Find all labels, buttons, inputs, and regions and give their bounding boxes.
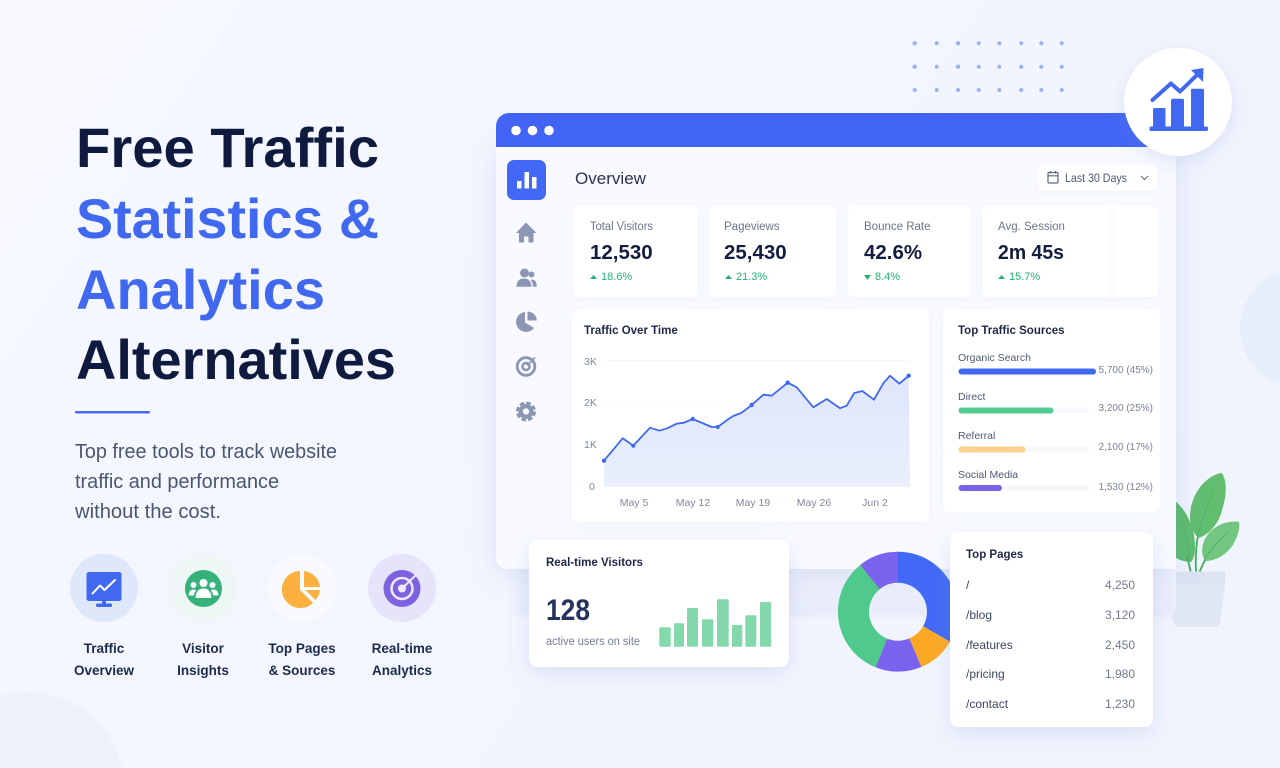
pot — [1172, 572, 1225, 627]
sidebar — [507, 160, 546, 420]
source row: direct: 3,200 (25%) — [1099, 403, 1153, 414]
stat card: bounce rate: Bounce Rate — [864, 221, 930, 233]
panel: top traffic sources — [943, 310, 1160, 512]
stat card: avg session: Avg. Session — [998, 221, 1065, 233]
label — [372, 641, 433, 678]
panel: traffic over time — [572, 310, 929, 522]
card: top pages: /pricing — [966, 667, 1005, 681]
stat card: bounce rate: 8.4% — [875, 271, 900, 283]
feature: traffic overview — [70, 554, 138, 678]
label: Traffic — [84, 641, 125, 656]
chart: area line: May 5 — [620, 497, 648, 509]
icon: target — [517, 358, 535, 375]
card: top pages: /contact — [966, 697, 1009, 711]
card: top pages: 4,250 — [1105, 578, 1135, 592]
chart: area line: 2K — [584, 397, 597, 409]
subtitle — [74, 441, 337, 523]
bar chart: live visitors — [659, 599, 771, 647]
icon: pie chart — [282, 571, 320, 608]
chart: area line: Jun 2 — [862, 497, 888, 509]
label: & Sources — [269, 663, 335, 678]
label — [74, 641, 135, 678]
subtitle: without the cost. — [74, 501, 221, 523]
panel: traffic over time: Traffic Over Time — [584, 325, 678, 337]
source row: social media — [958, 469, 1153, 493]
stat card: total visitors — [574, 206, 698, 297]
title: Analytics — [76, 258, 325, 321]
source row: organic search — [958, 352, 1153, 376]
dashboard window — [496, 113, 1176, 569]
icon: bars with rising arrow — [1150, 68, 1208, 131]
date range selector: Last 30 Days — [1065, 173, 1127, 185]
subtitle: traffic and performance — [75, 471, 279, 493]
stat card: avg session: 2m 45s — [998, 241, 1064, 264]
icon: monitor with trend line — [86, 572, 122, 607]
card: real-time visitors — [529, 540, 789, 667]
chart: area line: 3K — [584, 356, 597, 368]
icon: home — [516, 222, 536, 242]
stat card: avg session: 15.7% — [1009, 271, 1040, 283]
stat card: pageviews: Pageviews — [724, 221, 780, 233]
logo icon — [507, 160, 546, 200]
card: top pages: Top Pages — [966, 549, 1023, 561]
card: top pages: / — [966, 578, 970, 592]
source row: direct — [958, 391, 1153, 414]
card: top pages: /blog — [966, 608, 992, 622]
middle leaf — [1190, 473, 1226, 538]
card: top pages: 1,230 — [1105, 697, 1135, 711]
card: top pages: 3,120 — [1105, 608, 1135, 622]
title: Statistics & — [76, 187, 379, 250]
card: real-time visitors: active users on site — [546, 636, 640, 648]
feature: visitor insights — [169, 554, 237, 678]
subtitle: Top free tools to track website — [75, 441, 337, 463]
icon: group of people — [185, 570, 222, 607]
source row: referral — [958, 430, 1153, 453]
chart: area line: May 12 — [676, 497, 710, 509]
icon: target — [384, 570, 420, 607]
stat card: bounce rate: 42.6% — [864, 241, 922, 264]
label: Insights — [177, 663, 229, 678]
card: real-time visitors: Real-time Visitors — [546, 557, 643, 569]
label: Visitor — [182, 641, 225, 656]
dot grid decoration — [912, 41, 1064, 92]
badge: growth chart — [1124, 48, 1232, 156]
label — [177, 641, 229, 678]
icon: pie — [516, 312, 537, 332]
panel: top traffic sources: Top Traffic Sources — [958, 325, 1065, 337]
title: Alternatives — [76, 328, 396, 391]
label: Real-time — [372, 641, 433, 656]
card: top pages: 2,450 — [1105, 638, 1135, 652]
source row: organic search: 5,700 (45%) — [1099, 365, 1153, 376]
source row: social media: 1,530 (12%) — [1099, 482, 1153, 493]
title rule — [75, 411, 150, 414]
stat card: pageviews: 21.3% — [736, 271, 767, 283]
label: Analytics — [372, 663, 432, 678]
date range selector — [1038, 164, 1157, 191]
title: Free Traffic — [76, 116, 379, 179]
stat card: total visitors: 12,530 — [590, 241, 653, 264]
shadow band below window — [515, 566, 1176, 616]
card: top pages: /features — [966, 638, 1013, 652]
stat card: total visitors: Total Visitors — [590, 221, 653, 233]
donut chart — [838, 552, 958, 672]
source row: referral: 2,100 (17%) — [1099, 442, 1153, 453]
label: Overview — [74, 663, 135, 678]
veins and stems — [1181, 492, 1228, 571]
chart: area line — [584, 356, 911, 509]
left leaf — [1176, 502, 1195, 562]
chart: area line: 0 — [589, 481, 595, 493]
stat card: bounce rate — [848, 206, 971, 297]
label — [268, 641, 336, 678]
stat card: pageviews — [709, 206, 836, 297]
heading: overview: Overview — [575, 169, 647, 188]
chart: area line: May 26 — [797, 497, 831, 509]
chart: area line: May 19 — [736, 497, 770, 509]
window title bar — [496, 113, 1176, 147]
label: Top Pages — [268, 641, 336, 656]
right leaf — [1202, 521, 1239, 561]
source row: organic search: Organic Search — [958, 352, 1031, 364]
feature: real-time analytics — [368, 554, 436, 678]
icon: gear — [518, 403, 534, 420]
stat card: total visitors: 18.6% — [601, 271, 632, 283]
source row: referral: Referral — [958, 430, 995, 442]
icon: users — [516, 268, 537, 287]
source row: direct: Direct — [958, 391, 986, 403]
plant — [1172, 473, 1239, 627]
card: top pages: 1,980 — [1105, 667, 1135, 681]
title — [76, 116, 396, 391]
card: top pages — [950, 532, 1153, 727]
stat card: pageviews: 25,430 — [724, 241, 787, 264]
source row: social media: Social Media — [958, 469, 1018, 481]
stat card: avg session — [982, 206, 1158, 297]
chart: area line: 1K — [584, 439, 597, 451]
card: real-time visitors: 128 — [546, 594, 590, 627]
feature: top pages and sources — [268, 554, 336, 678]
